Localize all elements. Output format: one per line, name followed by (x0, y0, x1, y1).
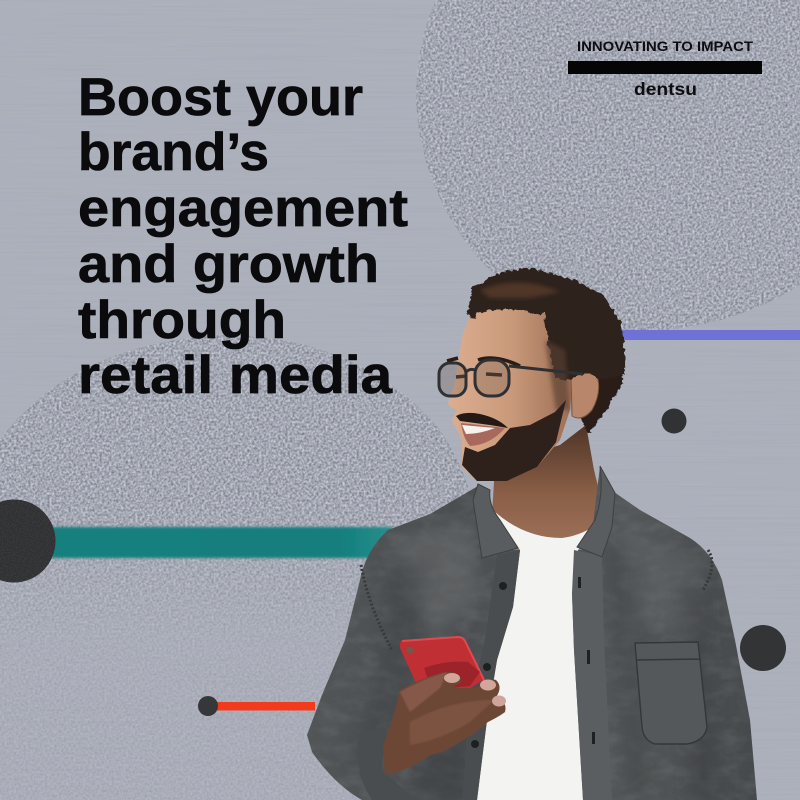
jacket wear texture (324, 496, 756, 798)
headline (78, 68, 408, 405)
teal bar (52, 527, 392, 558)
headline: Boost your (78, 68, 363, 127)
logo bar (568, 61, 762, 74)
beard (462, 400, 566, 481)
dark dot lower right (740, 625, 786, 671)
logo lockup (568, 39, 762, 99)
headline: and growth (78, 235, 379, 294)
shoulder seams (361, 550, 712, 650)
head (439, 267, 624, 481)
sideburn shading (545, 340, 570, 410)
hair highlight (480, 282, 560, 298)
speckled circle top right (416, 0, 800, 331)
headline: engagement (78, 179, 408, 238)
blue bar (620, 330, 800, 340)
moustache (456, 413, 508, 428)
neck (492, 425, 605, 550)
face (448, 305, 575, 481)
left placket (462, 550, 520, 800)
chest pocket (635, 642, 707, 744)
hair (466, 267, 624, 378)
speckled circle bottom left (0, 335, 480, 800)
headline: retail media (78, 346, 393, 405)
jacket buttons (471, 577, 595, 748)
right collar (577, 466, 615, 557)
back hair (540, 300, 624, 432)
headline: through (78, 291, 286, 350)
t-shirt (477, 512, 602, 800)
jacket body (307, 466, 757, 800)
headline: brand’s (78, 123, 269, 182)
small dark dot right (662, 408, 686, 434)
red bar (216, 702, 315, 710)
hand (383, 672, 506, 775)
glasses (439, 360, 583, 396)
person (300, 267, 770, 800)
right placket (572, 550, 612, 800)
tagline: INNOVATING TO IMPACT (577, 39, 754, 54)
teeth (462, 425, 495, 434)
sleeve cuff (358, 728, 415, 800)
eyes (456, 374, 502, 377)
fingernails (444, 673, 460, 683)
eyebrows (447, 358, 520, 366)
small dot on red bar (198, 696, 218, 716)
phone (400, 637, 484, 692)
smile (461, 423, 505, 446)
large black dot left (0, 500, 56, 582)
dentsu wordmark: dentsu (634, 79, 697, 99)
ear (571, 373, 599, 418)
left collar (473, 484, 518, 558)
